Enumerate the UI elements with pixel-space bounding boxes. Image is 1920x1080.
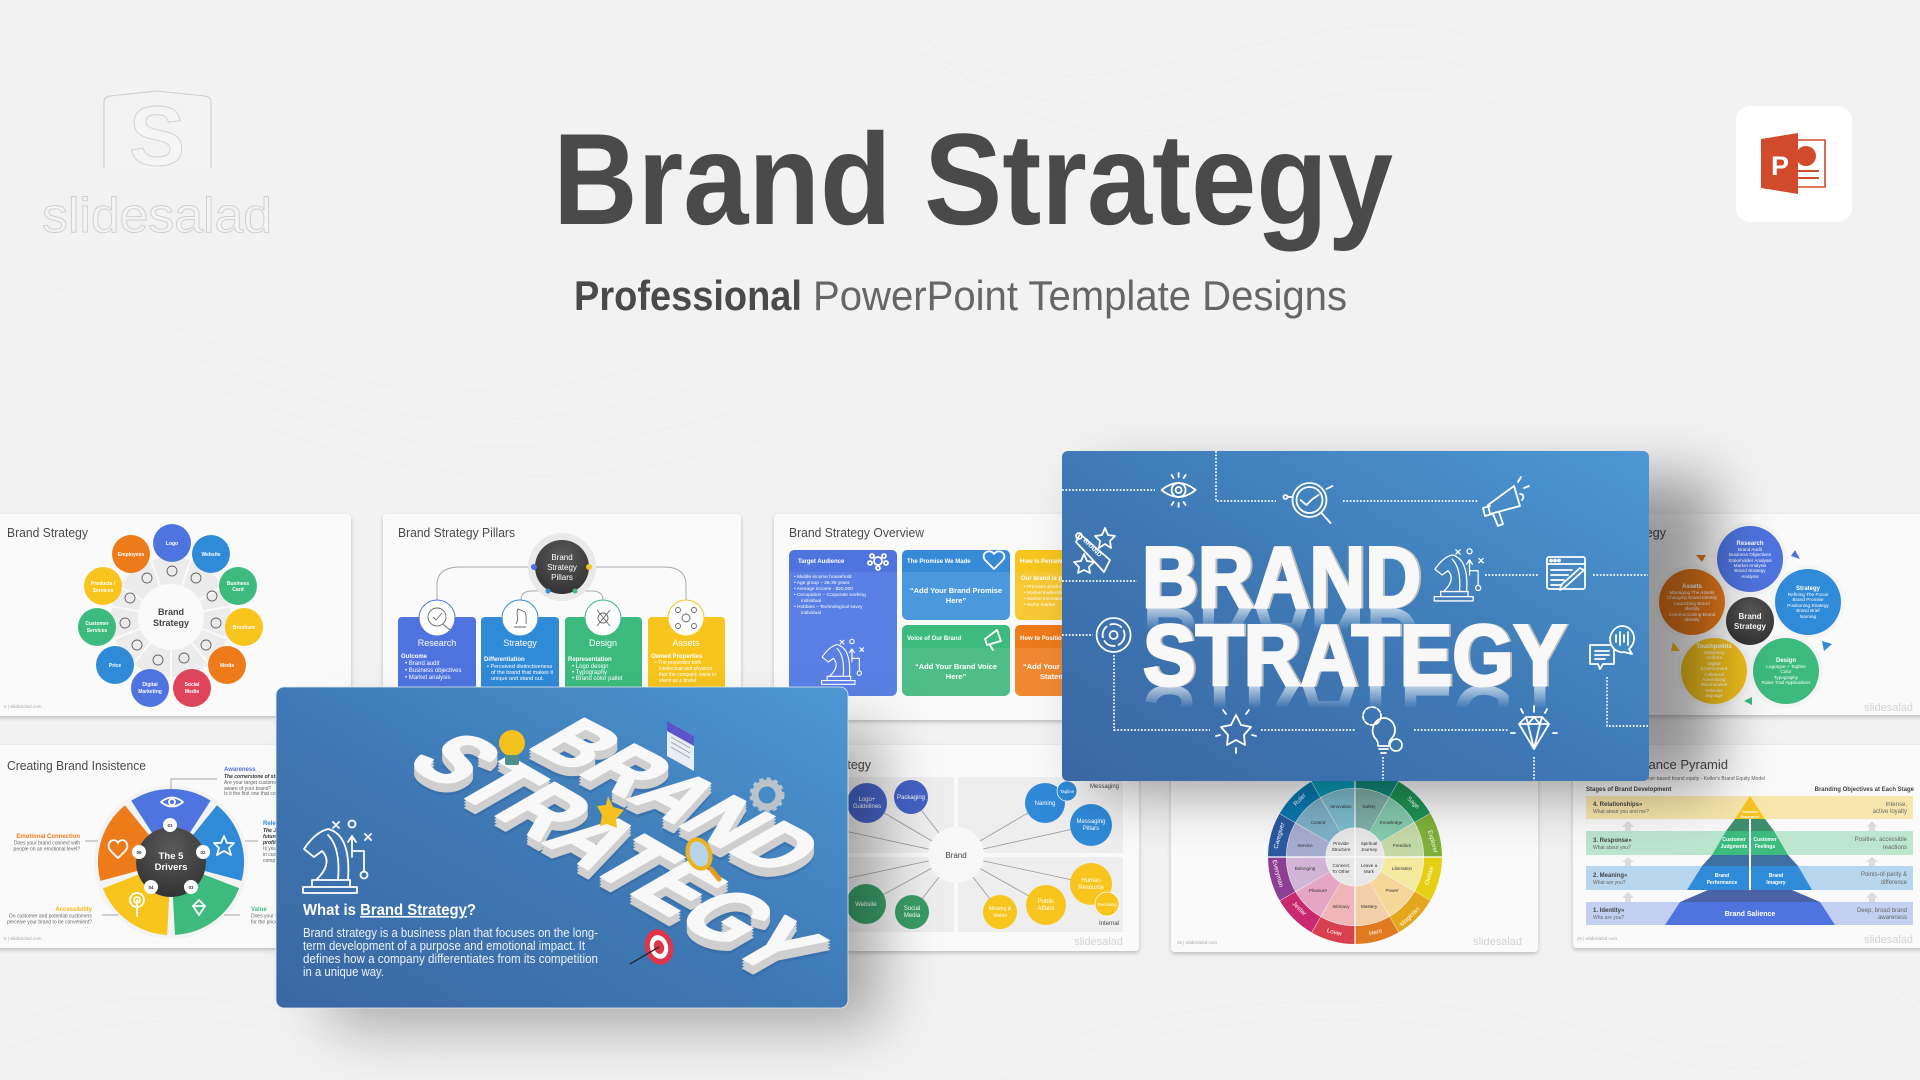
slide: Brand Strategy Overview: “Add Your Brand Voice bbox=[915, 662, 997, 671]
slide: Brand Strategy Overview: How is Perceived bbox=[1020, 559, 1070, 565]
slide: Brand Strategy circles (right): Brand bbox=[1738, 612, 1762, 621]
slide: archetype wheel: Provide bbox=[1333, 841, 1349, 846]
icon: eye bbox=[1162, 473, 1196, 507]
slide: Brand Strategy Pillars: • Logo design bbox=[572, 664, 608, 670]
slide: Brand Strategy wheel: Customer bbox=[85, 621, 109, 627]
slide: Brand Strategy circles (right): Brand Strategy bbox=[1583, 526, 1667, 540]
slide: archetype wheel: Freedom bbox=[1393, 843, 1411, 848]
slide: Brand Strategy wheel: Price bbox=[109, 663, 121, 669]
slide: Brand Strategy Pillars: • Market analysis bbox=[405, 675, 450, 681]
slide: Brand Strategy Overview: • Average income - $20,000 bbox=[794, 586, 853, 592]
slide: Brand Strategy Overview: “Add Your Position bbox=[1023, 662, 1092, 671]
slide: Brand Strategy circles (right): Logotype + Tagline bbox=[1766, 664, 1806, 669]
slide: Brand Strategy wheel: Business bbox=[227, 581, 249, 587]
slide: Brand Strategy Pillars: Outcome bbox=[401, 654, 428, 660]
slide: Brand Strategy circles (right): Assets bbox=[1682, 584, 1702, 590]
slide: Brand Resonance Pyramid: 26 | SlideSalad.com bbox=[1577, 936, 1617, 941]
3D heading: STRATEGY bbox=[1143, 667, 1566, 763]
slide: Creating Brand Insistence: future bbox=[263, 834, 277, 840]
slide: Brand Strategy Overview: Here” bbox=[946, 596, 966, 605]
slide: Brand Resonance Pyramid: active loyalty bbox=[1873, 809, 1907, 815]
slide: Creating Brand Insistence: 01 bbox=[167, 823, 173, 828]
slide: Brand Resonance Pyramid: 2. Meaning» bbox=[1593, 873, 1628, 879]
slide: archetype wheel: Knowledge bbox=[1380, 820, 1403, 825]
slide: Creating Brand Insistence: profit bbox=[262, 840, 276, 846]
slide: Brand Strategy Overview: • Occupation – Corporate working bbox=[794, 592, 866, 598]
slide: Creating Brand Insistence: The cornerstone of strategy bbox=[224, 774, 290, 780]
slide: Brand Strategy circles (right): Identity bbox=[1684, 617, 1700, 622]
slide: archetype wheel: Spiritual bbox=[1361, 841, 1377, 846]
slide: Brand Strategy wheel: Media bbox=[220, 663, 234, 669]
inner ring of motivations bbox=[1288, 790, 1422, 924]
logo: slidesalad: slidesalad bbox=[42, 189, 272, 243]
slide: Brand Strategy circles (right): Color bbox=[1780, 669, 1792, 674]
slide: Brand Strategy circles (right): Research bbox=[1736, 541, 1764, 547]
outer ring of archetypes bbox=[1248, 750, 1462, 964]
slide: archetype wheel: Control bbox=[1311, 820, 1325, 825]
slide: Brand Strategy Overview: Statement” bbox=[1040, 672, 1080, 681]
slide: archetype wheel: Ruler bbox=[1292, 792, 1308, 808]
slide: Brand Strategy circles (right) bbox=[1560, 514, 1920, 715]
slide: Brand Strategy Pillars: Representation bbox=[568, 657, 612, 663]
icon: document bbox=[667, 721, 694, 771]
slide: Brand Resonance Pyramid: Judgments bbox=[1721, 844, 1748, 850]
slide: Creating Brand Insistence: aware of your brand? bbox=[224, 786, 271, 792]
subtitle: Professional bbox=[574, 272, 802, 319]
slide: archetype wheel: Leave a bbox=[1361, 863, 1378, 868]
slide: Brand Strategy Overview: individual bbox=[801, 610, 821, 616]
slide: Brand Strategy mind map: Recruiting bbox=[1098, 902, 1117, 907]
slide: Brand Resonance Pyramid: reactions bbox=[1883, 845, 1907, 851]
slide: Brand Strategy circles (right): Vehicles bbox=[1705, 688, 1723, 693]
slide: Brand Strategy wheel: Brochure bbox=[233, 625, 255, 631]
slide: Brand Strategy mind map: Human bbox=[1081, 878, 1101, 884]
icon: megaphone bbox=[1483, 477, 1529, 526]
slide: Brand Strategy Pillars: Design bbox=[589, 638, 617, 648]
isometric heading: STRATEGY bbox=[386, 730, 848, 998]
slide: archetype wheel: Intimacy bbox=[1332, 904, 1350, 909]
slide: Brand Strategy mind map: Logo+ bbox=[859, 797, 876, 803]
slide: archetype wheel: Sage bbox=[1405, 795, 1421, 811]
slide: Brand Strategy circles (right): Collateral bbox=[1704, 672, 1724, 677]
isometric heading: BRAND bbox=[509, 710, 845, 889]
slide: Brand Resonance Pyramid: Brand bbox=[1769, 873, 1783, 879]
icon: document pencil bbox=[1547, 557, 1585, 590]
slide: Brand Resonance Pyramid bbox=[1573, 745, 1920, 948]
slide: Brand Strategy circles (right): Signage bbox=[1705, 693, 1723, 698]
slide: Brand Strategy mind map: Brand Strategy bbox=[788, 758, 872, 772]
slide: Brand Strategy wheel: Digital bbox=[142, 682, 158, 688]
slide: Brand Resonance Pyramid: What about you and me? bbox=[1593, 809, 1649, 815]
slide: Brand Strategy circles (right): Stationery bbox=[1703, 650, 1725, 655]
slide: Brand Strategy wheel: Brand Strategy bbox=[7, 526, 89, 540]
slide: Creating Brand Insistence: 04 bbox=[148, 885, 154, 890]
slide: Creating Brand Insistence: Awareness bbox=[224, 767, 256, 773]
slide: Brand Strategy mind map: Affairs bbox=[1038, 906, 1054, 912]
slide: archetype wheel: slidesalad bbox=[1473, 936, 1522, 948]
3D heading: STRATEGY bbox=[1145, 608, 1568, 704]
slide: Brand Resonance Pyramid: slidesalad bbox=[1864, 934, 1913, 946]
slide: Brand Strategy mind map: Media bbox=[904, 913, 921, 919]
slide: Brand Strategy Overview: Here” bbox=[946, 672, 966, 681]
logo: slidesalad bbox=[42, 89, 272, 243]
body text: in a unique way. bbox=[303, 965, 384, 979]
slide: Brand Strategy circles (right): Launching Brand bbox=[1674, 601, 1710, 606]
slide: Brand Strategy mind map: Internal bbox=[1099, 921, 1119, 927]
slide: Brand Strategy wheel: Services bbox=[93, 588, 114, 594]
slide: Brand Strategy circles (right): Rules Trad Applications bbox=[1762, 680, 1811, 685]
slide: Brand Resonance Pyramid: Customer bbox=[1722, 837, 1746, 843]
slide: Creating Brand Insistence: in cus bbox=[263, 852, 277, 858]
slide: Creating Brand Insistence: Drivers bbox=[155, 862, 187, 873]
isometric heading: BRAND bbox=[509, 719, 845, 898]
slide: Brand Strategy Pillars: that the company owns to bbox=[659, 672, 716, 678]
slide: Brand Strategy Overview: Our brand is perceived bbox=[1021, 576, 1087, 582]
slide: Brand Resonance Pyramid: Deep, broad brand bbox=[1857, 908, 1907, 914]
isometric heading: STRATEGY bbox=[386, 724, 848, 992]
slide: Creating Brand Insistence: Accessibility bbox=[55, 907, 93, 913]
slide: Brand Strategy circles (right): Changing Brand Identity bbox=[1667, 595, 1718, 600]
slide: Brand Strategy Pillars: • Business objectives bbox=[405, 668, 461, 674]
slide: Creating Brand Insistence: Does your brand deliver bbox=[251, 914, 304, 920]
slide: archetype wheel: Caregiver bbox=[1273, 822, 1286, 849]
panel: BRAND STRATEGY cover bbox=[1062, 451, 1649, 781]
slide: Brand Strategy circles (right): Stakeholder Analysis bbox=[1728, 558, 1772, 563]
isometric heading: BRAND bbox=[509, 707, 845, 886]
slide: Brand Strategy circles (right): Uniform bbox=[1706, 655, 1722, 660]
slide: Brand Strategy circles (right): Merchandise bbox=[1701, 682, 1728, 687]
slide: archetype wheel: Power bbox=[1385, 888, 1399, 893]
slide: Brand Strategy Overview bbox=[774, 514, 1132, 720]
icon: star bbox=[1216, 710, 1256, 753]
slide: Brand Strategy Pillars: Pillars bbox=[551, 573, 573, 582]
slide: archetype wheel: To Other bbox=[1332, 869, 1350, 874]
slide: Brand Strategy mind map: Public bbox=[1038, 899, 1054, 905]
slide: Brand Strategy circles (right): Digital bbox=[1707, 661, 1721, 666]
body text: Brand strategy is a business plan that focuses on the long- bbox=[303, 926, 598, 940]
slide: archetype wheel: Outlaw bbox=[1424, 865, 1436, 886]
3D heading bbox=[1142, 530, 1568, 763]
slide: Brand Strategy Overview: The Promise We Made bbox=[907, 559, 971, 565]
slide: Brand Strategy wheel: Products / bbox=[91, 581, 116, 587]
icon: cycle target bbox=[1097, 618, 1131, 652]
slide: Brand Strategy mind map: Tagline bbox=[1060, 789, 1075, 794]
panel: What is Brand Strategy bbox=[276, 687, 848, 1008]
slide: archetype wheel: Journey bbox=[1361, 847, 1378, 852]
slide: Brand Strategy circles (right): Brand Promise bbox=[1792, 597, 1824, 602]
slide: Brand Strategy wheel: 6 | SlideSalad.com bbox=[4, 704, 42, 709]
slide: Brand Resonance Pyramid: What are you? bbox=[1593, 880, 1626, 886]
slide: Creating Brand Insistence: Are your target customers bbox=[224, 780, 282, 786]
shadow of front panels bbox=[330, 480, 1715, 1025]
slide: archetype wheel: Lover bbox=[1326, 927, 1343, 938]
icon: analysis magnifier bbox=[1284, 483, 1332, 523]
slide: Brand Strategy Pillars: Strategy bbox=[547, 563, 577, 572]
icon: chat bubbles bbox=[1590, 626, 1634, 669]
slide: archetype wheel: Hero bbox=[1368, 927, 1384, 938]
slide: Brand Strategy Overview: • Premium product bbox=[1024, 584, 1064, 590]
subtitle: PowerPoint Template Designs bbox=[813, 272, 1347, 319]
icon: diamond bbox=[1511, 706, 1557, 749]
slide: Brand Strategy mind map: Packaging bbox=[897, 795, 925, 801]
isometric heading: STRATEGY bbox=[386, 718, 848, 986]
slide: Brand Strategy circles (right): Touchpoints bbox=[1696, 644, 1732, 650]
slide: Brand Strategy circles (right): Analysis bbox=[1741, 574, 1759, 579]
slide: Brand Strategy circles (right): Brand Brief bbox=[1796, 608, 1820, 613]
slide: Brand Strategy Pillars: Brand Strategy Pillars bbox=[398, 526, 515, 540]
icon: PowerPoint badge: P bbox=[1771, 151, 1789, 181]
slide: Brand Strategy circles (right): Strategy bbox=[1734, 622, 1767, 631]
slide: Brand Resonance Pyramid: Imagery bbox=[1766, 880, 1786, 886]
slide: Brand Strategy Pillars: stand as a brand bbox=[659, 678, 696, 684]
slide: Brand Strategy wheel bbox=[0, 514, 351, 716]
slide: Brand Resonance Pyramid: Brand Resonance Pyramid bbox=[1573, 757, 1728, 772]
slide: Brand Strategy wheel: Logo bbox=[166, 541, 178, 547]
slide: Brand Strategy wheel: Employees bbox=[118, 552, 144, 558]
slide: Brand Strategy circles (right): Strategy bbox=[1796, 586, 1821, 592]
slide: archetype wheel bbox=[1171, 745, 1538, 964]
slide: Brand Strategy mind map: Brand bbox=[945, 851, 967, 860]
slide: Creating Brand Insistence: 03 bbox=[188, 885, 194, 890]
slide: Brand Strategy circles (right): Environment bbox=[1701, 666, 1728, 671]
logo: slidesalad: S bbox=[129, 89, 185, 183]
slide: Brand Strategy Pillars: • Brand color pallet bbox=[572, 676, 623, 682]
slide: Brand Resonance Pyramid: 4. Relationships» bbox=[1593, 802, 1643, 808]
slide: Brand Strategy Pillars: • The properties both bbox=[655, 660, 702, 666]
slide: Brand Resonance Pyramid: Who are you? bbox=[1593, 915, 1624, 921]
slide: Brand Strategy circles (right): Refining The Focus bbox=[1788, 592, 1829, 597]
slide: Brand Strategy Overview: Target Audience bbox=[798, 559, 845, 565]
slide: Brand Strategy circles (right): Positioning Strategy bbox=[1787, 603, 1829, 608]
slide: archetype wheel: Innovation bbox=[1330, 804, 1352, 809]
slide: Brand Resonance Pyramid: Points-of-parity & bbox=[1861, 872, 1907, 878]
slide: Brand Strategy Pillars: • Typography bbox=[572, 670, 607, 676]
slide: Brand Strategy circles (right): Design bbox=[1776, 658, 1796, 664]
slide: Brand Strategy Pillars: of the brand that makes it bbox=[491, 670, 554, 676]
body text bbox=[303, 926, 598, 979]
slide: archetype wheel: Mastery bbox=[1361, 904, 1378, 909]
3D heading: BRAND bbox=[1142, 589, 1421, 685]
slide: Brand Strategy mind map: slidesalad bbox=[1074, 936, 1123, 948]
icon: gear bbox=[751, 779, 783, 811]
slide: Brand Strategy circles (right): Communicating Brand bbox=[1669, 612, 1716, 617]
slide: archetype wheel: Everyman bbox=[1270, 859, 1285, 889]
slide: Brand Strategy wheel: Social bbox=[185, 682, 200, 688]
slide: Brand Strategy mind map: Messaging bbox=[1090, 784, 1119, 790]
slide: Brand Resonance Pyramid: Brand bbox=[1715, 873, 1729, 879]
slide: Brand Strategy circles (right): Advertising bbox=[1702, 677, 1726, 682]
slide: Brand Strategy Overview: How to Position bbox=[1020, 636, 1066, 642]
body text: defines how a company differentiates from its competition bbox=[303, 952, 598, 966]
icon: target bbox=[630, 926, 677, 968]
slide: Brand Resonance Pyramid: 1. Identity» bbox=[1593, 908, 1625, 914]
slide: archetype wheel: 36 | SlideSalad.com bbox=[1177, 940, 1217, 945]
slide: Brand Strategy mind map: Vision bbox=[993, 913, 1007, 919]
slide: Brand Resonance Pyramid: Intense, bbox=[1886, 802, 1907, 808]
slide: Creating Brand Insistence: comp bbox=[263, 858, 275, 864]
slide: Creating Brand Insistence: The Job bbox=[263, 828, 282, 834]
slide: Brand Strategy Overview: • Middle income household bbox=[794, 574, 852, 580]
slide: Creating Brand Insistence: 02 bbox=[200, 850, 206, 855]
slide: Brand Strategy mind map: Social bbox=[904, 906, 920, 912]
slide: archetype wheel: Mark bbox=[1364, 869, 1375, 874]
slide: Brand Strategy circles (right): Typography bbox=[1774, 675, 1799, 680]
slide: Creating Brand Insistence bbox=[0, 745, 354, 948]
slide: Brand Strategy Overview: • Age group – 25-35 years bbox=[794, 580, 850, 586]
slide: Creating Brand Insistence: Is it the first one that comes bbox=[224, 791, 286, 797]
slide: Creating Brand Insistence: perceive your brand to be convenient? bbox=[7, 920, 92, 926]
slide: Brand Resonance Pyramid: Positive, accessible bbox=[1855, 837, 1908, 843]
slide: Brand Strategy circles (right): Brand Strategy bbox=[1734, 568, 1766, 573]
slide: Creating Brand Insistence: The 5 bbox=[159, 851, 184, 862]
slide: Brand Strategy Pillars bbox=[383, 514, 741, 716]
icon: knight bbox=[303, 820, 371, 893]
slide: Brand Strategy Pillars: Strategy bbox=[503, 638, 537, 648]
slide: Brand Resonance Pyramid: Resonance bbox=[1741, 815, 1759, 819]
slide: Brand Strategy Pillars: Differentiation bbox=[484, 657, 525, 663]
slide: archetype wheel: Connect bbox=[1332, 863, 1350, 868]
slide: Brand Strategy circles (right): Business Objectives bbox=[1729, 552, 1772, 557]
dotted connectors bbox=[1062, 451, 1648, 781]
isometric heading: BRAND bbox=[509, 713, 845, 892]
slide: Brand Strategy wheel: Marketing bbox=[138, 689, 162, 695]
slide: Brand Resonance Pyramid: Branding Objectives at Each Stage bbox=[1815, 787, 1915, 793]
slide: archetype wheel: Magician bbox=[1399, 905, 1422, 928]
3D heading: STRATEGY bbox=[1143, 608, 1566, 704]
slide: Brand Strategy mind map: Messaging bbox=[1076, 819, 1106, 825]
slide: archetype wheel: Safety bbox=[1362, 804, 1376, 809]
slide: Brand Strategy circles (right): Naming bbox=[1800, 614, 1816, 619]
slide: archetype wheel: Jester bbox=[1291, 901, 1307, 917]
slide: Brand Strategy circles (right): Brand Audit bbox=[1738, 547, 1763, 552]
heading: What is Brand Strategy? bbox=[303, 902, 476, 919]
slide: Brand Resonance Pyramid: difference bbox=[1881, 880, 1908, 886]
slide: Brand Strategy Pillars: unique and stand out. bbox=[491, 676, 544, 682]
slide: archetype wheel: Liberation bbox=[1392, 866, 1413, 871]
slide: Brand Strategy circles (right): slidesalad bbox=[1864, 702, 1913, 714]
slide: Brand Resonance Pyramid: What about you? bbox=[1593, 845, 1631, 851]
slide: archetype wheel: Belonging bbox=[1295, 866, 1316, 871]
slide: Brand Strategy wheel: Strategy bbox=[153, 618, 189, 628]
slide: Brand Strategy wheel: Card bbox=[232, 587, 244, 593]
slide: Creating Brand Insistence: Value bbox=[251, 907, 267, 913]
body text: term development of a purpose and emotional impact. It bbox=[303, 939, 585, 953]
slide: Creating Brand Insistence: Is your bbox=[263, 846, 278, 852]
isometric heading: STRATEGY bbox=[386, 721, 848, 989]
slide: Brand Strategy wheel: Media bbox=[185, 689, 199, 695]
slide: Brand Resonance Pyramid: Performance bbox=[1707, 880, 1737, 886]
slide: Brand Strategy mind map: Naming bbox=[1035, 801, 1055, 807]
icon: brand tag: BRAND bbox=[1081, 537, 1103, 559]
icon: idea gears bbox=[1363, 707, 1402, 753]
icon: PowerPoint badge bbox=[1736, 106, 1852, 222]
slide: Brand Resonance Pyramid: Brand Salience bbox=[1725, 911, 1775, 918]
slide: Brand Strategy Overview: Brand Strategy Overview bbox=[789, 526, 925, 540]
icon: magnifier bbox=[684, 836, 719, 879]
slide: Brand Strategy Pillars: • Brand audit bbox=[405, 661, 440, 667]
isometric heading: BRAND bbox=[509, 716, 845, 895]
slide: Brand Strategy wheel: Website bbox=[201, 552, 221, 558]
3D heading: BRAND bbox=[1142, 530, 1421, 626]
slide: Brand Strategy circles (right): Identity bbox=[1684, 606, 1700, 611]
icon: star bbox=[597, 796, 624, 828]
slide: Creating Brand Insistence: 05 bbox=[136, 850, 142, 855]
slide: Creating Brand Insistence: Creating Brand Insistence bbox=[7, 759, 146, 773]
slide: Brand Strategy circles (right): Managing The Assets bbox=[1670, 590, 1715, 595]
slide: Brand Strategy mind map: Website bbox=[855, 902, 877, 908]
slide: archetype wheel: Explorer bbox=[1426, 830, 1439, 854]
slide: Brand Strategy wheel: Brand bbox=[158, 607, 184, 617]
slide: Brand Strategy Overview: Voice of Our Brand bbox=[907, 636, 962, 642]
slide: Brand Resonance Pyramid: Customer-based brand equity - Keller's Brand Equity Model bbox=[1633, 776, 1765, 782]
slide: Brand Strategy Overview: • Market leadership bbox=[1024, 590, 1065, 596]
slide: archetype wheel: Structure bbox=[1332, 847, 1351, 852]
slide: Brand Strategy Overview: • Niche market bbox=[1024, 602, 1056, 608]
slide: Brand Strategy Overview: individual bbox=[801, 598, 821, 604]
slide: Brand Strategy Overview: “Add Your Brand Promise bbox=[910, 586, 1002, 595]
icon: brand tag bbox=[1074, 528, 1115, 573]
slide: Brand Resonance Pyramid: awareness bbox=[1878, 915, 1907, 921]
slide: Brand Strategy Pillars: Assets bbox=[672, 638, 700, 648]
slide: Brand Strategy mind map: Guidelines bbox=[853, 804, 881, 810]
slide: Brand Strategy Pillars: • Perceived distinctiveness bbox=[487, 664, 552, 670]
slide: Brand Strategy mind map bbox=[780, 745, 1139, 951]
slide: Brand Resonance Pyramid: Feelings bbox=[1755, 844, 1775, 850]
slide: Brand Strategy Overview: • Hobbies – Technological savvy bbox=[794, 604, 863, 610]
slide: Brand Resonance Pyramid: Stages of Brand Development bbox=[1586, 787, 1671, 793]
slide: Creating Brand Insistence: for the price? bbox=[251, 920, 280, 926]
slide: Creating Brand Insistence: Does your brand connect with bbox=[14, 840, 80, 846]
slide: Brand Strategy Pillars: intellectual and physical bbox=[659, 666, 712, 672]
slide: Creating Brand Insistence: 5 | SlideSalad.com bbox=[4, 936, 42, 941]
slide: Brand Strategy Pillars: Owned Properties bbox=[651, 654, 703, 660]
slide: Brand Resonance Pyramid: Customer bbox=[1753, 837, 1777, 843]
slide: Creating Brand Insistence: people on an emotional level? bbox=[14, 846, 80, 852]
slide: Creating Brand Insistence: Emotional Connection bbox=[16, 834, 80, 840]
slide: Brand Strategy Pillars: Brand bbox=[551, 553, 573, 562]
slide: Brand Strategy mind map: Missing & bbox=[989, 906, 1012, 912]
subtitle bbox=[574, 272, 1347, 319]
title: Brand Strategy bbox=[553, 106, 1393, 252]
isometric heading: STRATEGY bbox=[386, 727, 848, 995]
slide: Brand Resonance Pyramid: Customer bbox=[1742, 810, 1759, 814]
slide: Creating Brand Insistence: Relevance bbox=[263, 821, 293, 827]
slide: archetype wheel: Pleasure bbox=[1309, 888, 1328, 893]
slide: Brand Resonance Pyramid: 3. Response» bbox=[1593, 838, 1632, 844]
icon: knight bbox=[1434, 549, 1483, 601]
slide: Brand Strategy mind map: Pillars bbox=[1083, 826, 1099, 832]
slide: Brand Strategy circles (right): Market Analysis bbox=[1734, 563, 1767, 568]
slide: Brand Strategy Overview: • Market innovator bbox=[1024, 596, 1063, 602]
3D heading: BRAND bbox=[1144, 530, 1423, 626]
slide: Brand Strategy wheel: Services bbox=[87, 628, 108, 634]
slide: Creating Brand Insistence: Do customer and potential customers bbox=[9, 914, 92, 920]
icon: light bulb bbox=[499, 730, 525, 765]
slide: Brand Strategy Pillars: Research bbox=[418, 638, 456, 648]
slide: archetype wheel: Service bbox=[1297, 843, 1313, 848]
slide: Brand Strategy mind map: Resource bbox=[1078, 885, 1104, 891]
